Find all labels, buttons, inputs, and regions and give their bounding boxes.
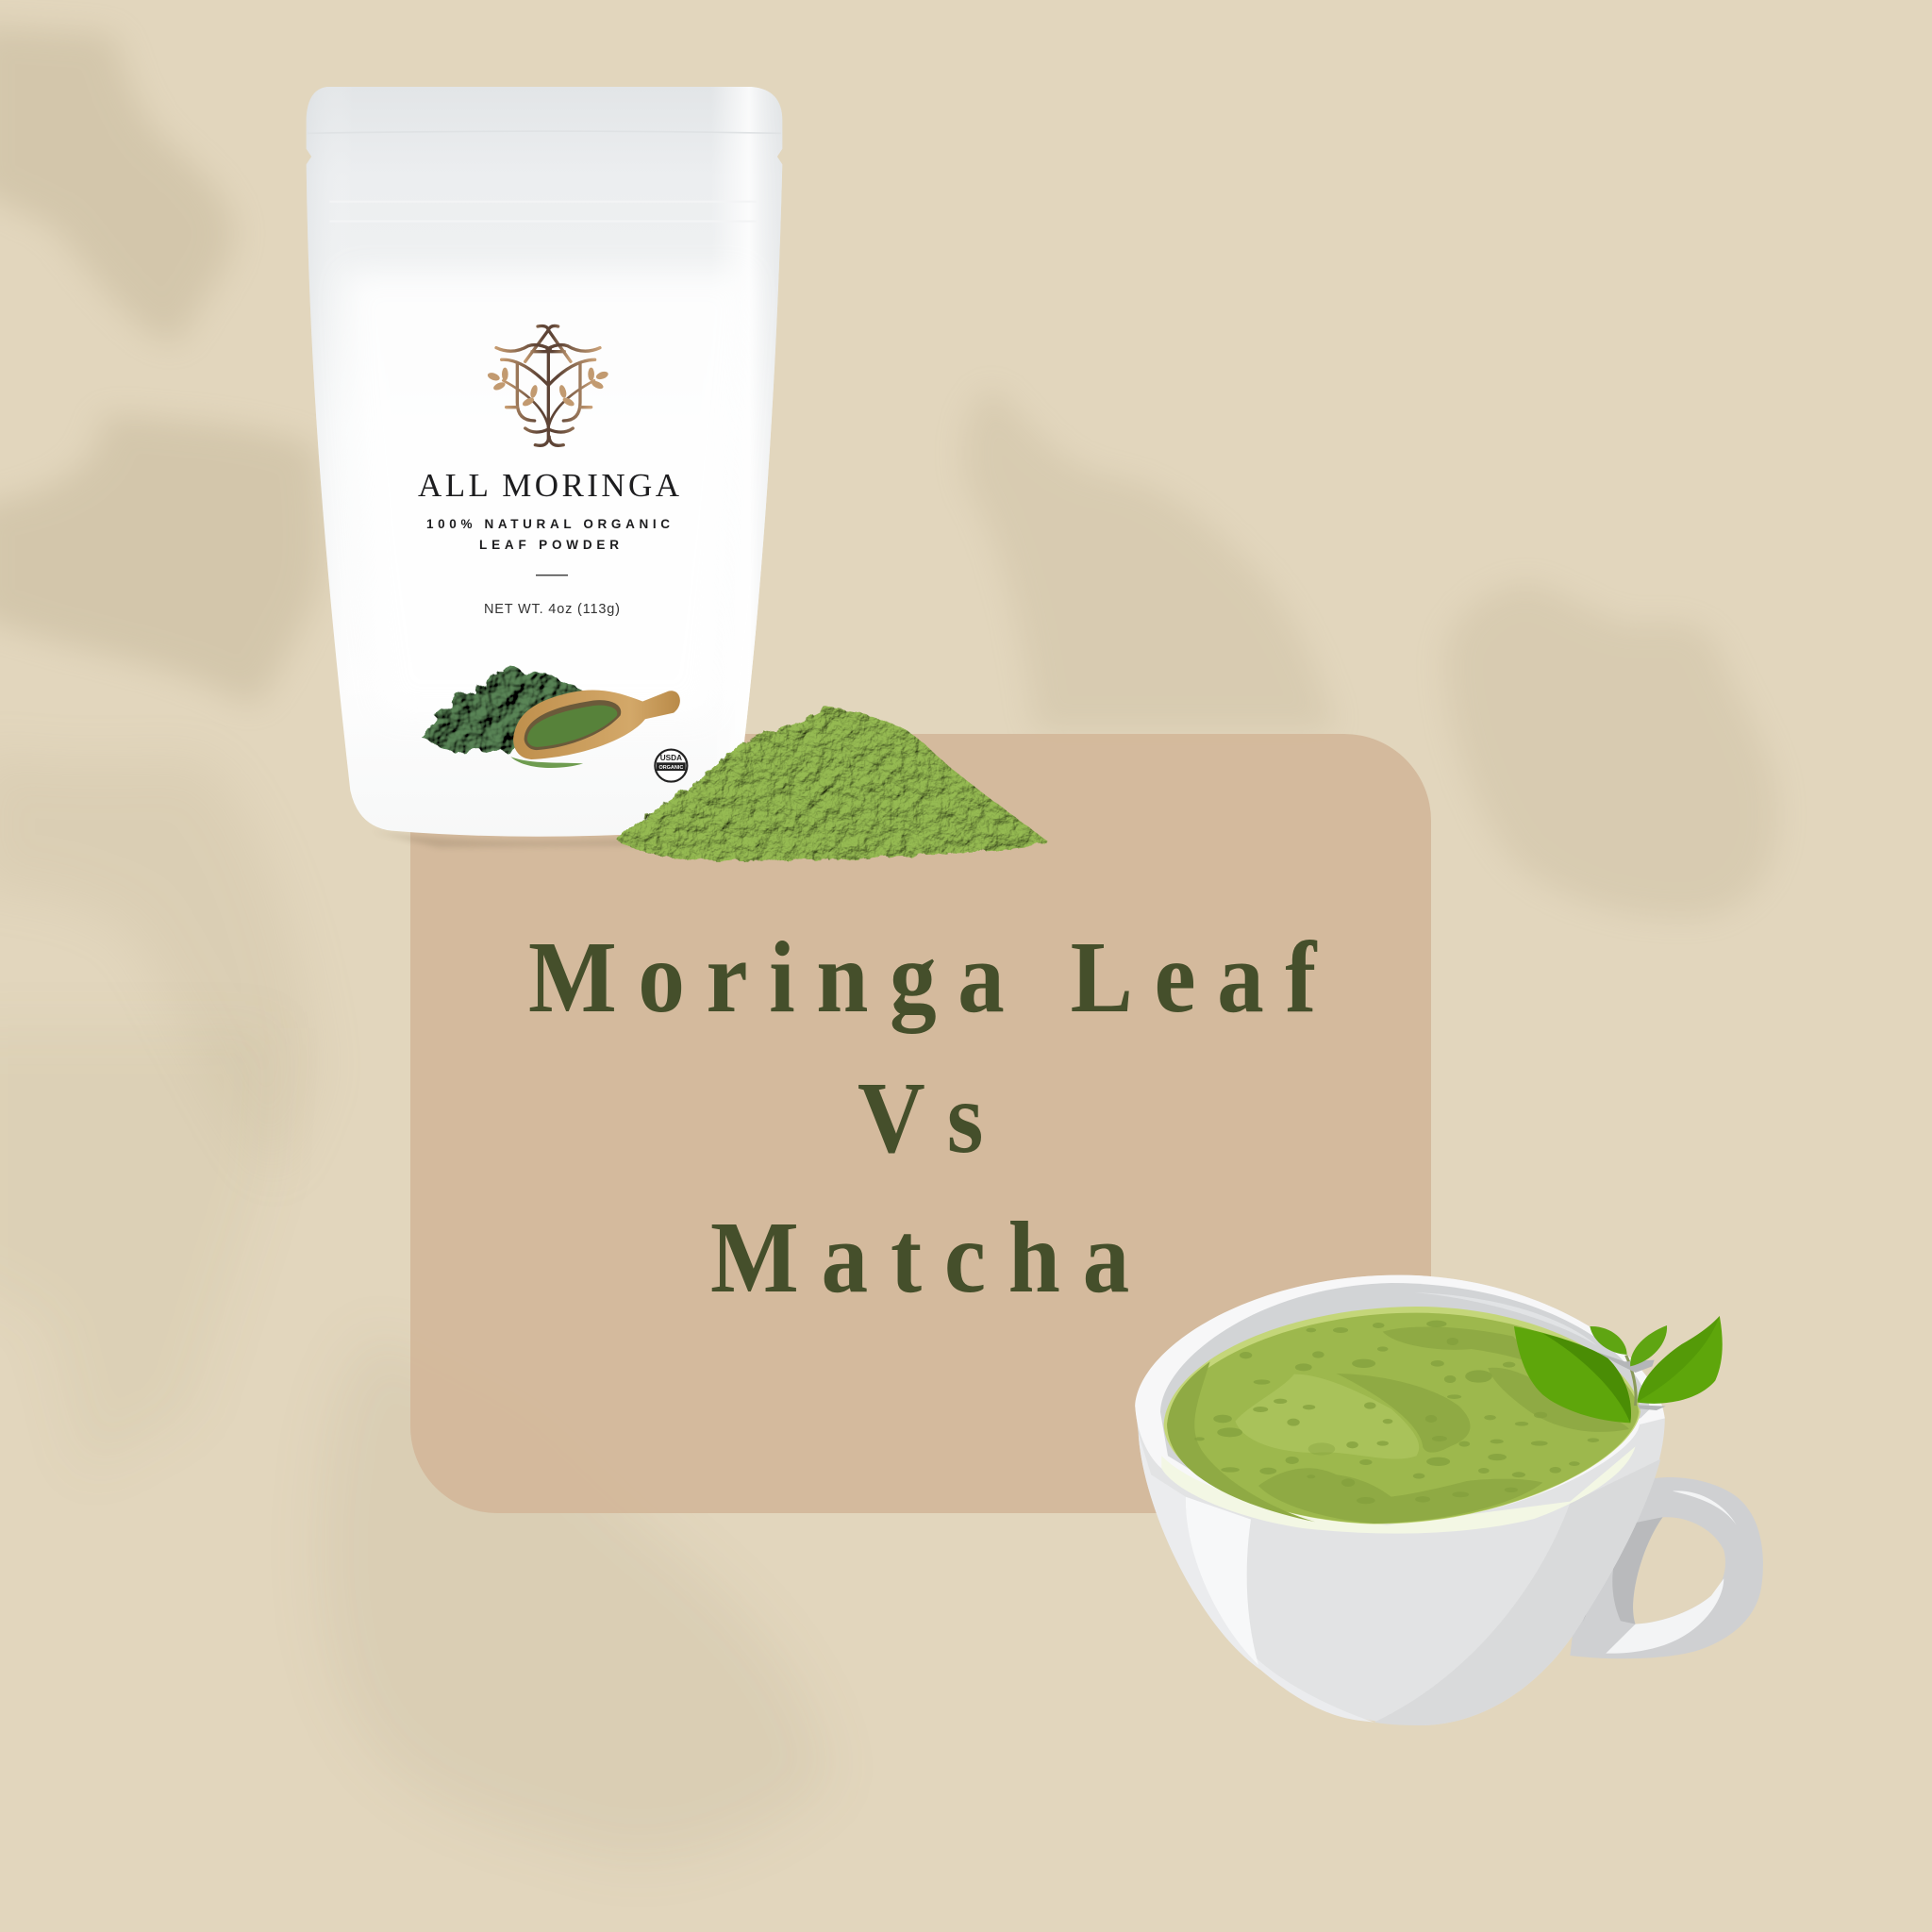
USDA organic seal	[655, 750, 687, 782]
pouch label text: LEAF POWDER	[479, 538, 619, 552]
panel: tan rounded card	[410, 734, 1431, 1513]
title: Moringa Leaf Vs Matcha: Matcha	[710, 1202, 1129, 1314]
mint sprig	[1514, 1316, 1723, 1423]
USDA organic seal: ORGANIC	[658, 765, 683, 771]
leaves and wooden scoop on pouch	[422, 664, 680, 768]
title: Moringa Leaf Vs Matcha: Moringa Leaf	[528, 922, 1318, 1034]
pouch label text: 100% NATURAL ORGANIC	[426, 517, 670, 531]
pouch body	[307, 87, 782, 847]
pouch label text	[418, 467, 680, 617]
USDA organic seal: USDA	[660, 754, 682, 762]
title: Moringa Leaf Vs Matcha: Vs	[858, 1062, 983, 1174]
pouch label text: ALL MORINGA	[418, 467, 680, 504]
cup handle	[1570, 1477, 1763, 1658]
matcha surface	[1164, 1307, 1641, 1524]
cup body	[1135, 1275, 1665, 1725]
pouch logo: monogram tree	[487, 325, 609, 445]
cup rim and inner wall	[1135, 1275, 1665, 1534]
pouch label text: NET WT. 4oz (113g)	[484, 602, 620, 617]
